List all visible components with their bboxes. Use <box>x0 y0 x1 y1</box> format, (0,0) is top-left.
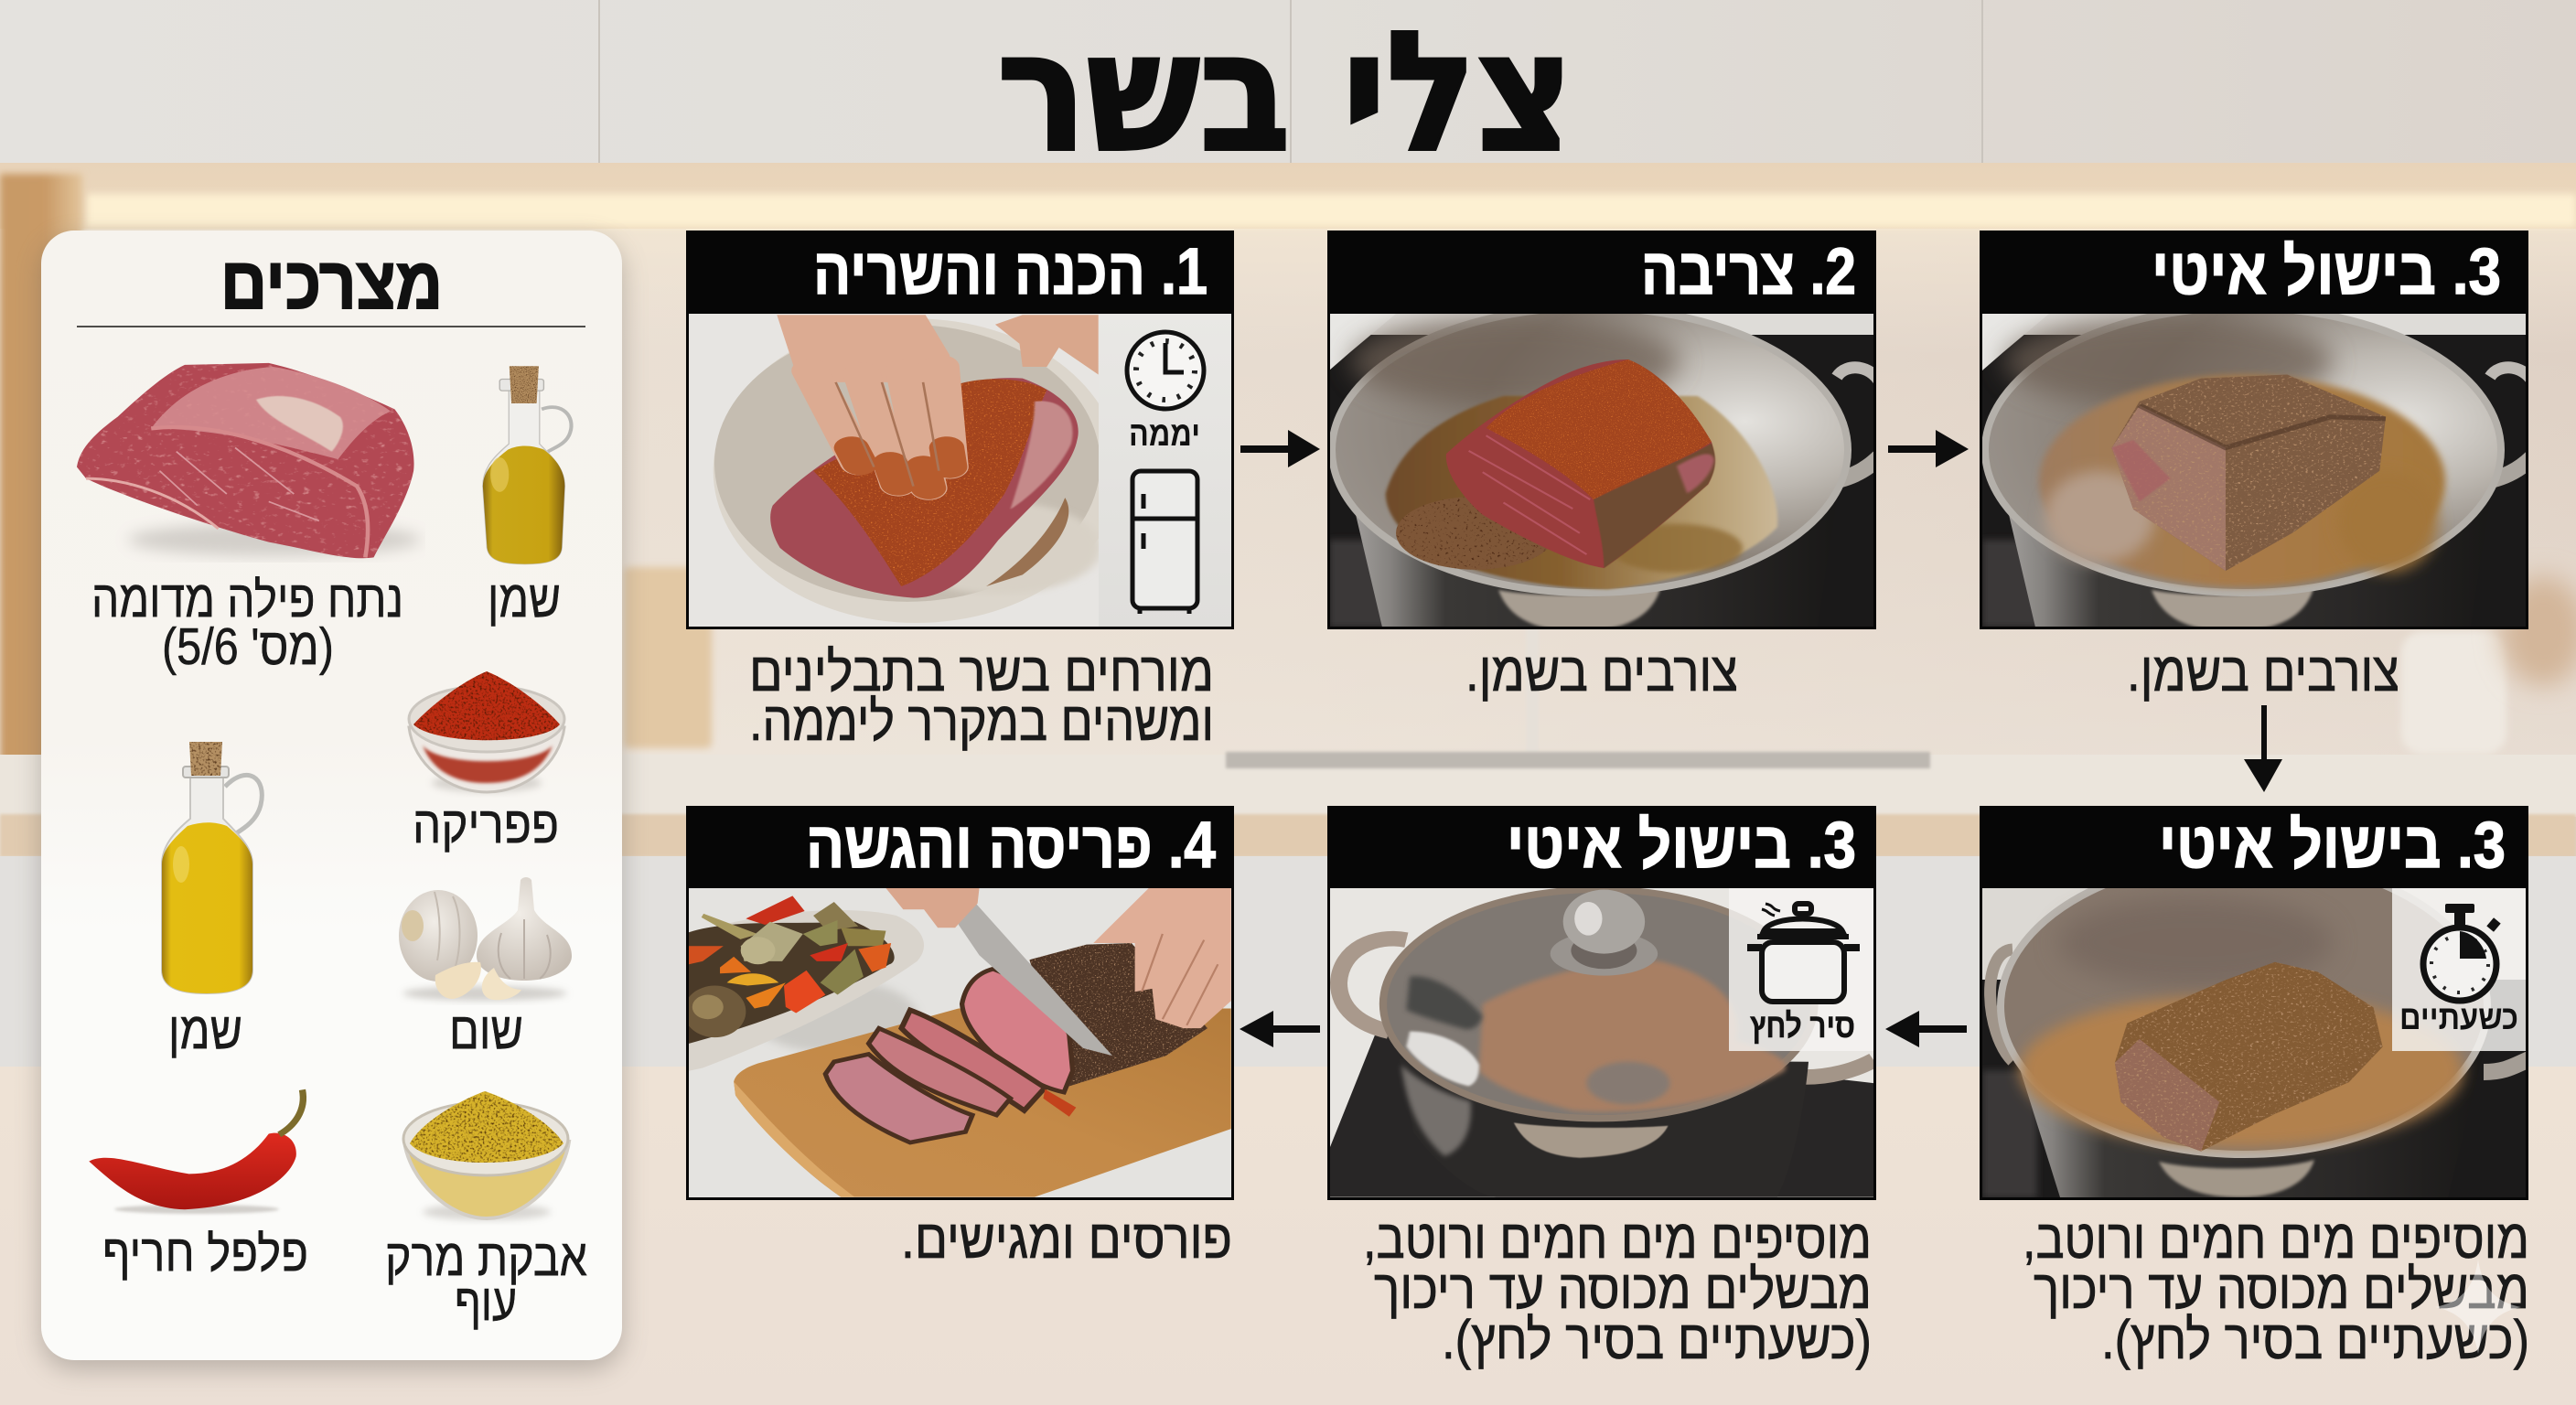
arrow: down to second row <box>2244 705 2282 792</box>
caption: pressure pot step <box>1363 1212 1872 1370</box>
caption: step 1 <box>749 641 1214 752</box>
arrow: step 3 simmer to pressure pot <box>1885 1011 1967 1047</box>
label: beef cut: (מס' 5/6) <box>162 617 334 676</box>
icon: large oil bottle <box>161 742 264 994</box>
icon: red chili pepper <box>89 1089 307 1215</box>
step 3 heading: 3. בישול איטי <box>2152 236 2501 308</box>
photo: covered pot on stove <box>1330 888 1873 1197</box>
panel: ingredients <box>28 227 635 1381</box>
photo: meat simmering in sauce <box>1982 888 2526 1197</box>
label: chicken stock powder <box>385 1235 587 1332</box>
label: pressure cooker: סיר לחץ <box>1750 1007 1855 1045</box>
card: step 3 pressure pot <box>1327 806 1876 1200</box>
card: step 1 marinate <box>686 231 1234 629</box>
card: step 3 browned meat <box>1980 231 2528 629</box>
card: step 4 slicing and serving <box>686 806 1234 1200</box>
icon: pressure pot <box>1747 904 1860 1002</box>
icon: sparkle watermark <box>2433 1258 2523 1357</box>
step 4 heading: 4. פריסה והגשה <box>806 810 1216 882</box>
icon: garlic <box>399 877 572 1004</box>
step 1 heading: 1. הכנה והשריה <box>813 236 1208 308</box>
card: step 3 simmering <box>1980 806 2528 1200</box>
step 3 pot heading: 3. בישול איטי <box>1507 810 1856 882</box>
icon: small oil bottle <box>482 366 573 565</box>
arrow: step 2 to step 3 <box>1888 430 1969 467</box>
icon: yellow stock powder bowl <box>402 1091 571 1223</box>
step 3 simmer heading: 3. בישול איטי <box>2159 810 2506 882</box>
photo: browned meat in pot <box>1982 314 2526 627</box>
arrow: step 1 to step 2 <box>1240 430 1320 467</box>
photo: sliced roast on board <box>689 888 1231 1197</box>
label: one day: יממה <box>1129 415 1200 454</box>
caption: simmer step <box>2012 1212 2538 1381</box>
card: step 2 searing <box>1327 231 1876 629</box>
icon: stopwatch <box>2423 904 2501 1001</box>
photo: searing seasoned meat <box>1330 314 1873 627</box>
icon: clock <box>1127 332 1204 409</box>
arrow: pressure pot to serving <box>1240 1011 1320 1047</box>
side panel: marinate one day in fridge <box>1099 314 1231 627</box>
photo: seasoning meat in bowl <box>689 314 1099 627</box>
label: chicken stock powder: עוף <box>455 1273 517 1332</box>
step 2 heading: 2. צריבה <box>1641 236 1856 308</box>
icon: paprika bowl <box>407 671 566 795</box>
icon: fridge <box>1132 471 1197 614</box>
icon: raw beef roast <box>77 362 421 562</box>
label: beef cut <box>91 576 403 676</box>
